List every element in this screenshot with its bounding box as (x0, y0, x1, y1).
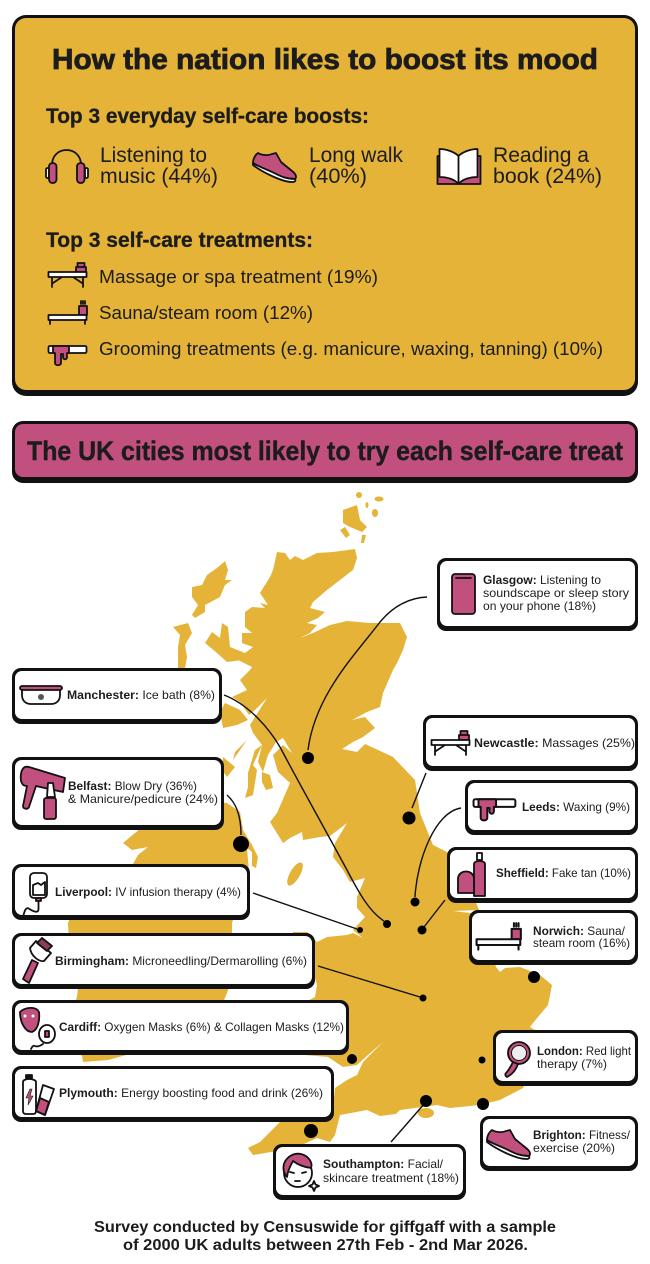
text: listening to music (100, 144, 218, 188)
text: Sheffield: Fake tan (10%) (496, 866, 631, 880)
callout: Plymouth (12, 1066, 334, 1122)
connector lines (224, 597, 461, 1142)
text: Glasgow: Listening to (483, 573, 601, 587)
icon: wax strip (474, 799, 515, 820)
icon: tan bottle and mitt (458, 853, 485, 896)
text (533, 1128, 631, 1155)
text: Leeds: Waxing (9%) (522, 800, 630, 814)
icon: face with towel (283, 1154, 319, 1191)
icon: massage table (432, 731, 470, 755)
text: reading a book (493, 144, 602, 188)
text: long walk (309, 144, 403, 188)
text (68, 779, 218, 806)
icon: wax strip (48, 346, 86, 365)
city location dots (233, 752, 540, 1138)
text: skincare treatment (18%) (323, 1171, 459, 1185)
callout: Southampton (273, 1144, 466, 1200)
callout: Belfast (12, 757, 224, 830)
callout: Liverpool (12, 864, 250, 920)
icon: sauna bench (477, 923, 521, 950)
icon: shoe (487, 1130, 530, 1159)
text: soundscape or sleep story (483, 586, 629, 600)
text: reading a book: Reading a (493, 144, 589, 167)
text: Manchester: Ice bath (8%) (67, 688, 215, 702)
text: Plymouth: Energy boosting food and drink (26%) (59, 1086, 323, 1100)
callout: Glasgow (437, 558, 638, 631)
callout: Manchester (12, 668, 222, 724)
text (533, 924, 630, 950)
text: on your phone (18%) (483, 599, 596, 613)
callout: Norwich (469, 910, 638, 965)
panel: section header (12, 421, 638, 483)
heading: treatments: Top 3 self-care treatments: (46, 229, 313, 252)
text: long walk: Long walk (309, 144, 403, 167)
text (483, 573, 629, 613)
text: exercise (20%) (533, 1141, 615, 1155)
text: therapy (7%) (537, 1057, 607, 1071)
icon: sauna bench (48, 301, 87, 324)
icon: book (438, 149, 480, 184)
text (323, 1157, 459, 1185)
text: Cardiff: Oxygen Masks (6%) & Collagen Masks (12%) (59, 1020, 344, 1034)
icon: oxygen mask (20, 1008, 55, 1049)
text: reading a book: book (24%) (493, 165, 602, 188)
icon: phone (452, 574, 475, 614)
text: Liverpool: IV infusion therapy (4%) (55, 885, 241, 899)
callout: Newcastle (423, 715, 638, 771)
text: long walk: (40%) (309, 165, 367, 188)
text: & Manicure/pedicure (24%) (68, 792, 218, 806)
text: Birmingham: Microneedling/Dermarolling (6%) (55, 954, 307, 968)
text: sauna: Sauna/steam room (12%) (99, 302, 313, 323)
text: massage: Massage or spa treatment (19%) (99, 266, 378, 287)
map of the UK (60, 492, 552, 1155)
footer: survey note (94, 1219, 556, 1254)
text: Belfast: Blow Dry (36%) (68, 779, 197, 793)
icon: energy bottle and bar (23, 1075, 54, 1115)
icon: massage table (48, 263, 86, 287)
text: Southampton: Facial/ (323, 1157, 444, 1171)
text: steam room (16%) (533, 936, 630, 950)
text: listening to music: music (44%) (100, 165, 218, 188)
text: listening to music: Listening to (100, 144, 207, 167)
callout: London (493, 1030, 638, 1086)
icon: red light mirror (505, 1042, 530, 1077)
icon: ice bath (20, 686, 62, 704)
text: grooming: Grooming treatments (e.g. manicure, waxing, tanning) (10%) (99, 338, 603, 359)
text: London: Red light (537, 1044, 632, 1058)
callout: Birmingham (12, 933, 315, 989)
text (537, 1044, 632, 1071)
callout: Leeds (465, 780, 638, 835)
callout: Brighton (480, 1116, 638, 1171)
callout: Sheffield (447, 847, 638, 903)
icon: dermaroller (23, 938, 52, 983)
panel: top mood boosts (12, 15, 638, 396)
heading: everyday boosts: Top 3 everyday self-care boosts: (46, 105, 369, 128)
title: How the nation likes to boost its mood (52, 44, 598, 76)
icon: headphones (46, 150, 88, 183)
icon: shoe (253, 153, 296, 182)
callout: Cardiff (12, 1000, 349, 1055)
text: Norwich: Sauna/ (533, 924, 626, 938)
footer: survey note: Survey conducted by Censuswide for giffgaff with a sample (94, 1219, 556, 1236)
text: Brighton: Fitness/ (533, 1128, 631, 1142)
icon: hair dryer and nail polish (21, 767, 65, 819)
icon: IV bag (24, 873, 47, 915)
text: Newcastle: Massages (25%) (474, 736, 635, 750)
footer: survey note: of 2000 UK adults between 27th Feb - 2nd Mar 2026. (123, 1237, 528, 1254)
